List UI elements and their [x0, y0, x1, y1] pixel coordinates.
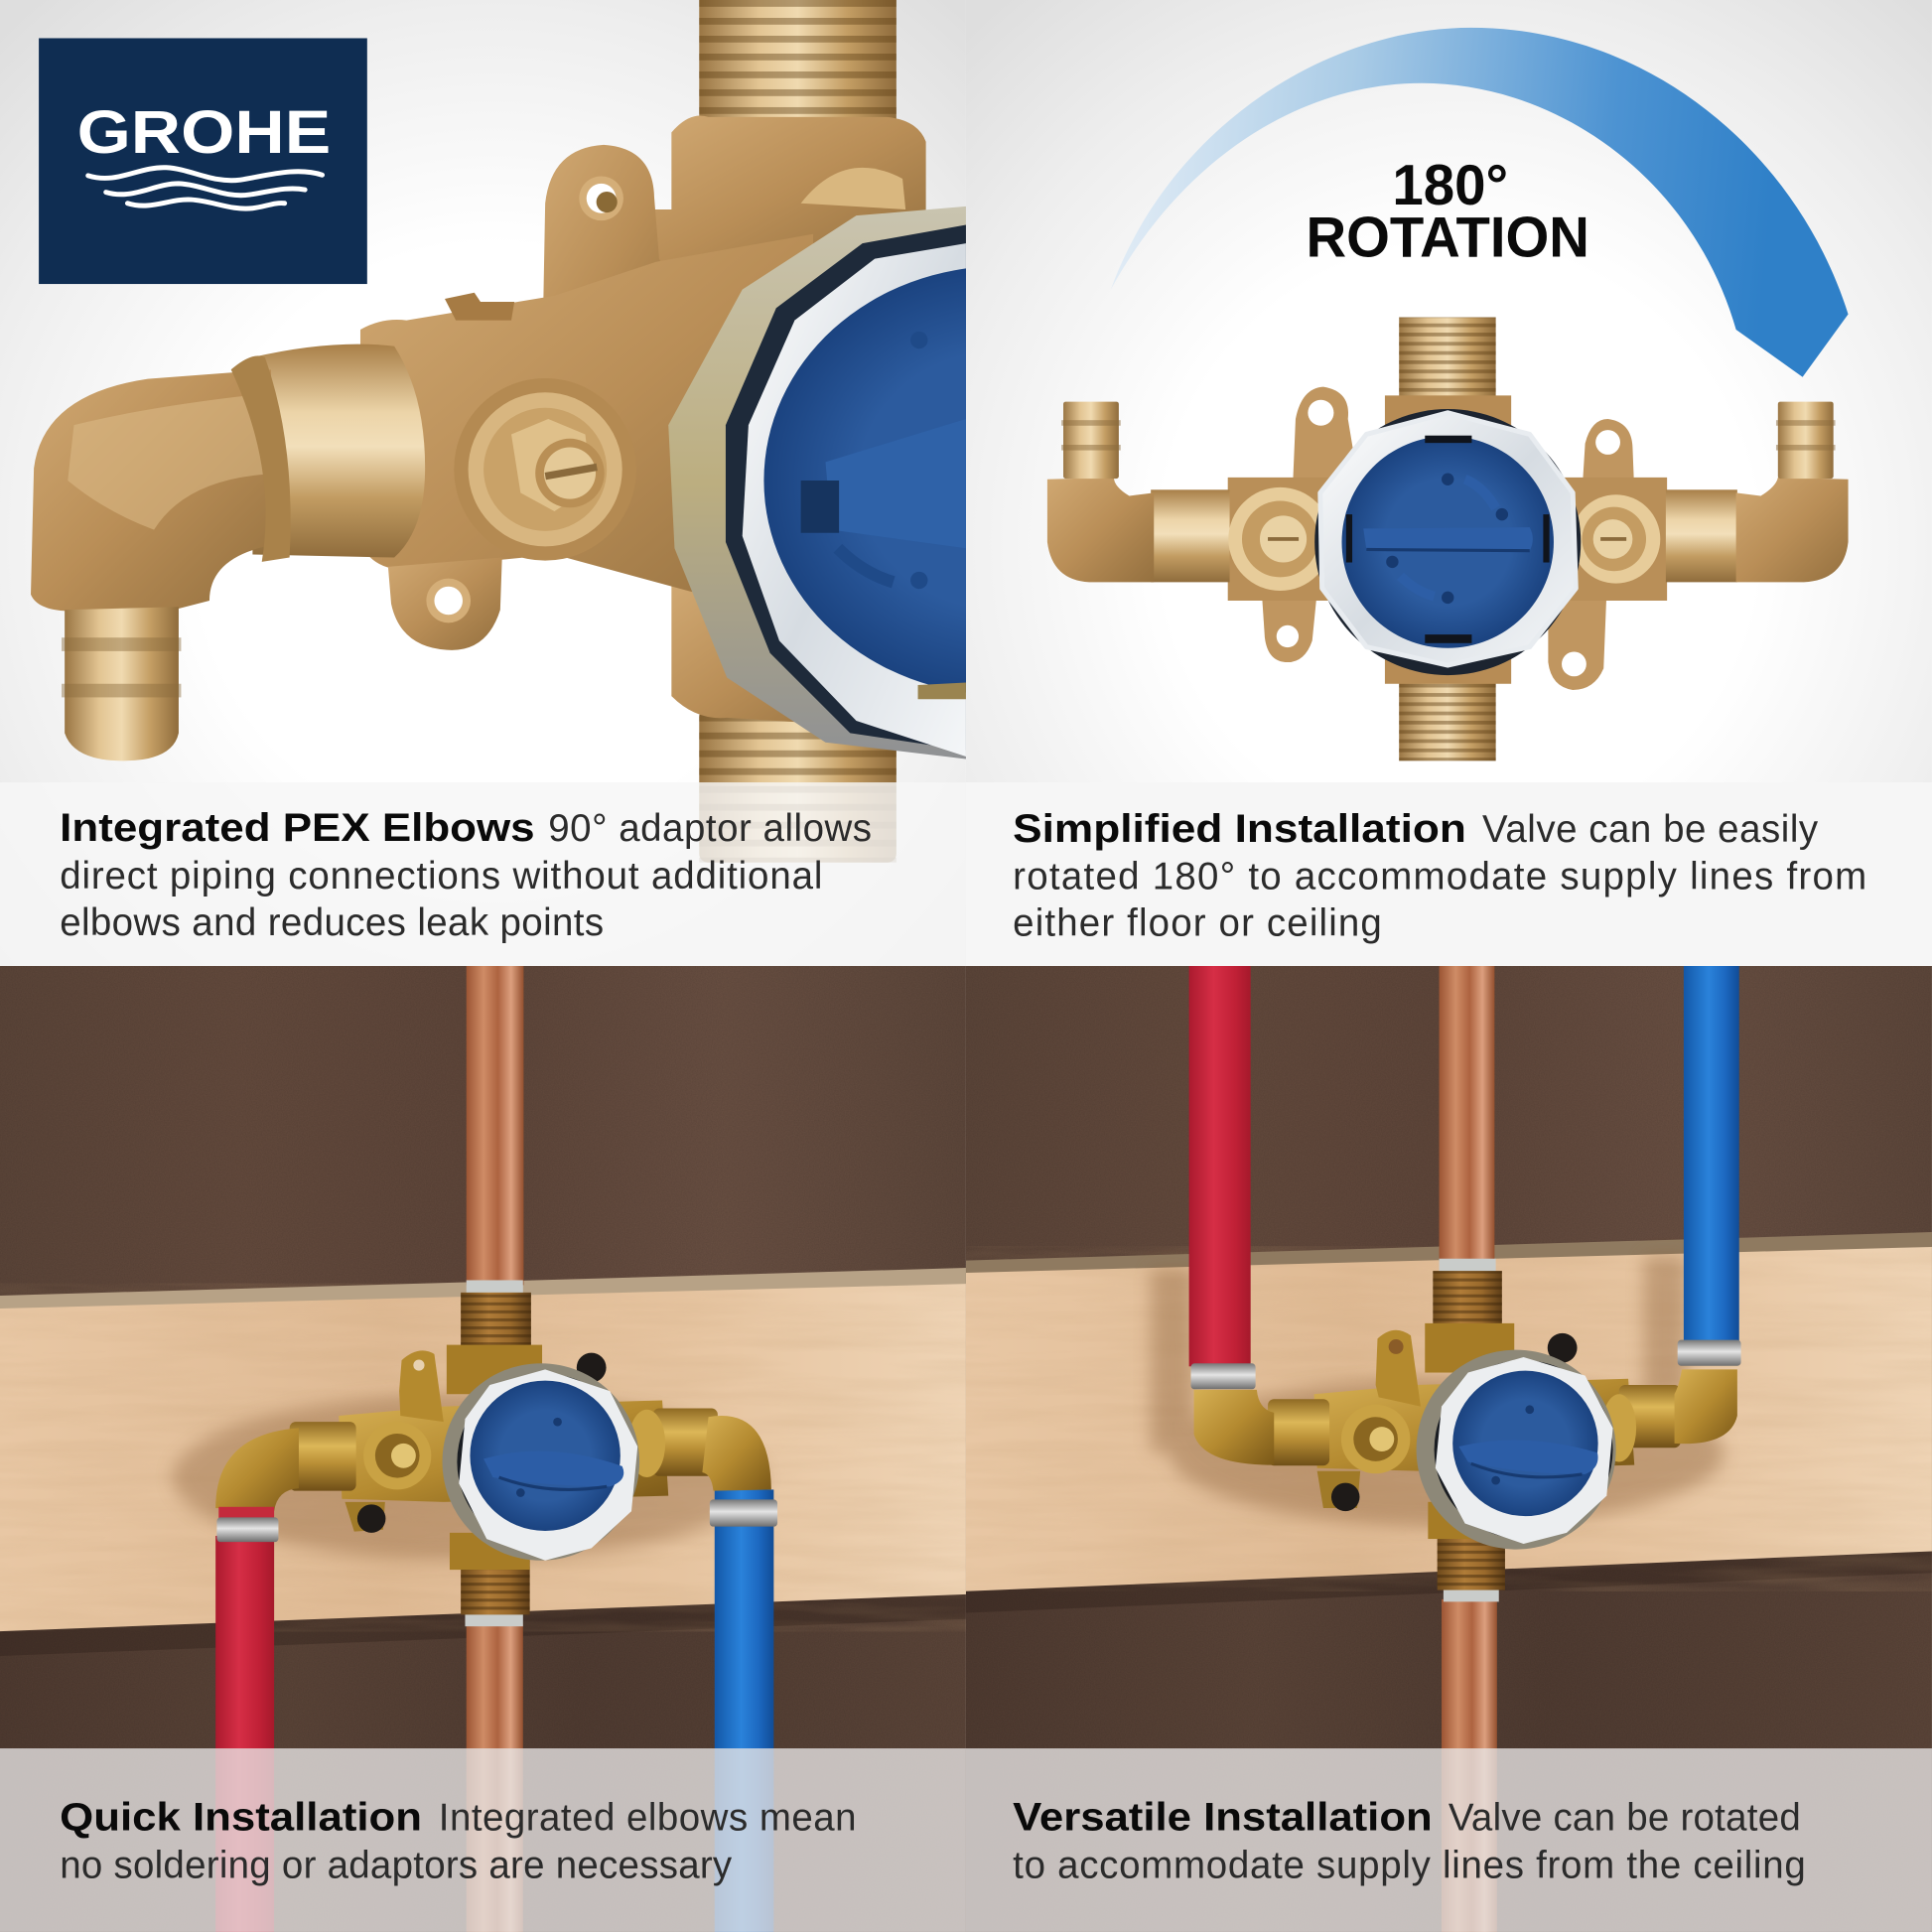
caption text: Valve can be easily	[1482, 808, 1819, 851]
rotation label: ROTATION	[1307, 207, 1589, 270]
valve shadow	[173, 1394, 763, 1561]
steel nut and ring	[443, 1363, 639, 1561]
caption band	[966, 1748, 1932, 1932]
screw boss	[1341, 1394, 1636, 1473]
caption text	[60, 806, 872, 944]
mounting ear with hole	[543, 145, 660, 298]
caption band	[966, 782, 1932, 966]
horizontal valve body	[360, 234, 813, 616]
caption text: Versatile Installation	[1013, 1796, 1433, 1840]
brass elbows	[1194, 1369, 1737, 1465]
panel: integrated PEX elbows	[0, 0, 966, 966]
mounting screws	[1331, 1333, 1578, 1511]
screw boss	[363, 1410, 665, 1489]
screw boss	[454, 378, 636, 561]
sleeve	[252, 345, 425, 558]
body necks	[1385, 395, 1511, 684]
lower mounting ear	[388, 558, 502, 650]
panel: simplified installation	[966, 0, 1932, 966]
screw bosses	[1228, 487, 1660, 591]
caption text: rotated 180° to accommodate supply lines from	[1013, 855, 1866, 897]
PEX barb	[62, 607, 181, 760]
caption text: elbows and reduces leak points	[60, 901, 604, 944]
steel nut and ring	[1417, 1350, 1616, 1550]
caption text: Integrated elbows mean	[439, 1797, 856, 1840]
caption text: Integrated PEX Elbows	[60, 806, 535, 850]
copper pipes	[1440, 966, 1499, 1932]
body necks	[653, 116, 926, 727]
caption text: no soldering or adaptors are necessary	[60, 1844, 733, 1886]
threaded stubs	[1433, 1271, 1505, 1590]
caption text: Quick Installation	[60, 1796, 422, 1840]
pipe shadows	[1151, 1256, 1724, 1527]
blue cap with handle	[763, 266, 1238, 699]
brass elbows	[215, 1409, 771, 1518]
hose clamps	[1190, 1340, 1741, 1389]
red PEX pipe	[215, 1536, 274, 1932]
caption text: 90° adaptor allows	[548, 807, 872, 850]
logo wordmark: GROHE	[77, 98, 331, 166]
horizontal body	[1228, 478, 1667, 601]
wood plank	[966, 1232, 1932, 1613]
red PEX pipe	[1189, 963, 1251, 1366]
dark gasket	[1314, 409, 1581, 675]
threaded stubs	[1399, 318, 1496, 760]
blue cap	[1342, 436, 1554, 648]
blue cap with handle	[470, 1381, 623, 1531]
octagonal steel nut	[668, 207, 966, 759]
PEX barbs	[1061, 402, 1836, 479]
blue cap with handle	[1452, 1371, 1598, 1516]
caption text	[1013, 1796, 1806, 1886]
valve body	[1314, 1323, 1634, 1539]
logo waves	[88, 168, 323, 208]
bottom threaded pipe	[699, 709, 897, 863]
brown wall	[0, 966, 966, 1932]
brown wall	[966, 966, 1932, 1932]
panel: quick installation	[0, 966, 966, 1932]
valve body	[339, 1345, 668, 1570]
panel: versatile installation	[966, 963, 1932, 1932]
90 degree elbow	[31, 355, 291, 612]
caption band	[0, 1748, 966, 1932]
top threaded pipe	[699, 0, 897, 123]
blue PEX pipe	[1684, 963, 1739, 1345]
rotation arrow	[1111, 28, 1849, 377]
rotation label	[1307, 154, 1589, 270]
caption text	[60, 1796, 856, 1886]
mounting ears	[1262, 387, 1634, 690]
caption band	[0, 782, 966, 966]
caption text: direct piping connections without additional	[60, 855, 822, 897]
wood plank	[0, 1268, 966, 1656]
small casting tab	[445, 293, 514, 321]
mounting screws	[357, 1353, 607, 1533]
copper pipes	[465, 966, 523, 1932]
threaded stubs	[461, 1293, 531, 1614]
sleeves	[1151, 489, 1737, 582]
caption text	[1013, 807, 1866, 945]
valve close-up	[31, 0, 966, 863]
logo badge	[39, 38, 367, 284]
caption text: Valve can be rotated	[1449, 1797, 1801, 1840]
rotation label: 180°	[1392, 154, 1508, 217]
dark gasket	[726, 224, 966, 751]
valve front view	[1047, 318, 1849, 760]
chrome ring	[1320, 413, 1576, 665]
caption text: either floor or ceiling	[1013, 902, 1382, 945]
chrome ring	[743, 243, 966, 757]
blue PEX pipe	[715, 1489, 773, 1932]
hose clamps	[216, 1499, 777, 1542]
caption text: to accommodate supply lines from the ceiling	[1013, 1844, 1806, 1886]
caption text: Simplified Installation	[1013, 807, 1466, 851]
elbows	[1047, 478, 1849, 582]
